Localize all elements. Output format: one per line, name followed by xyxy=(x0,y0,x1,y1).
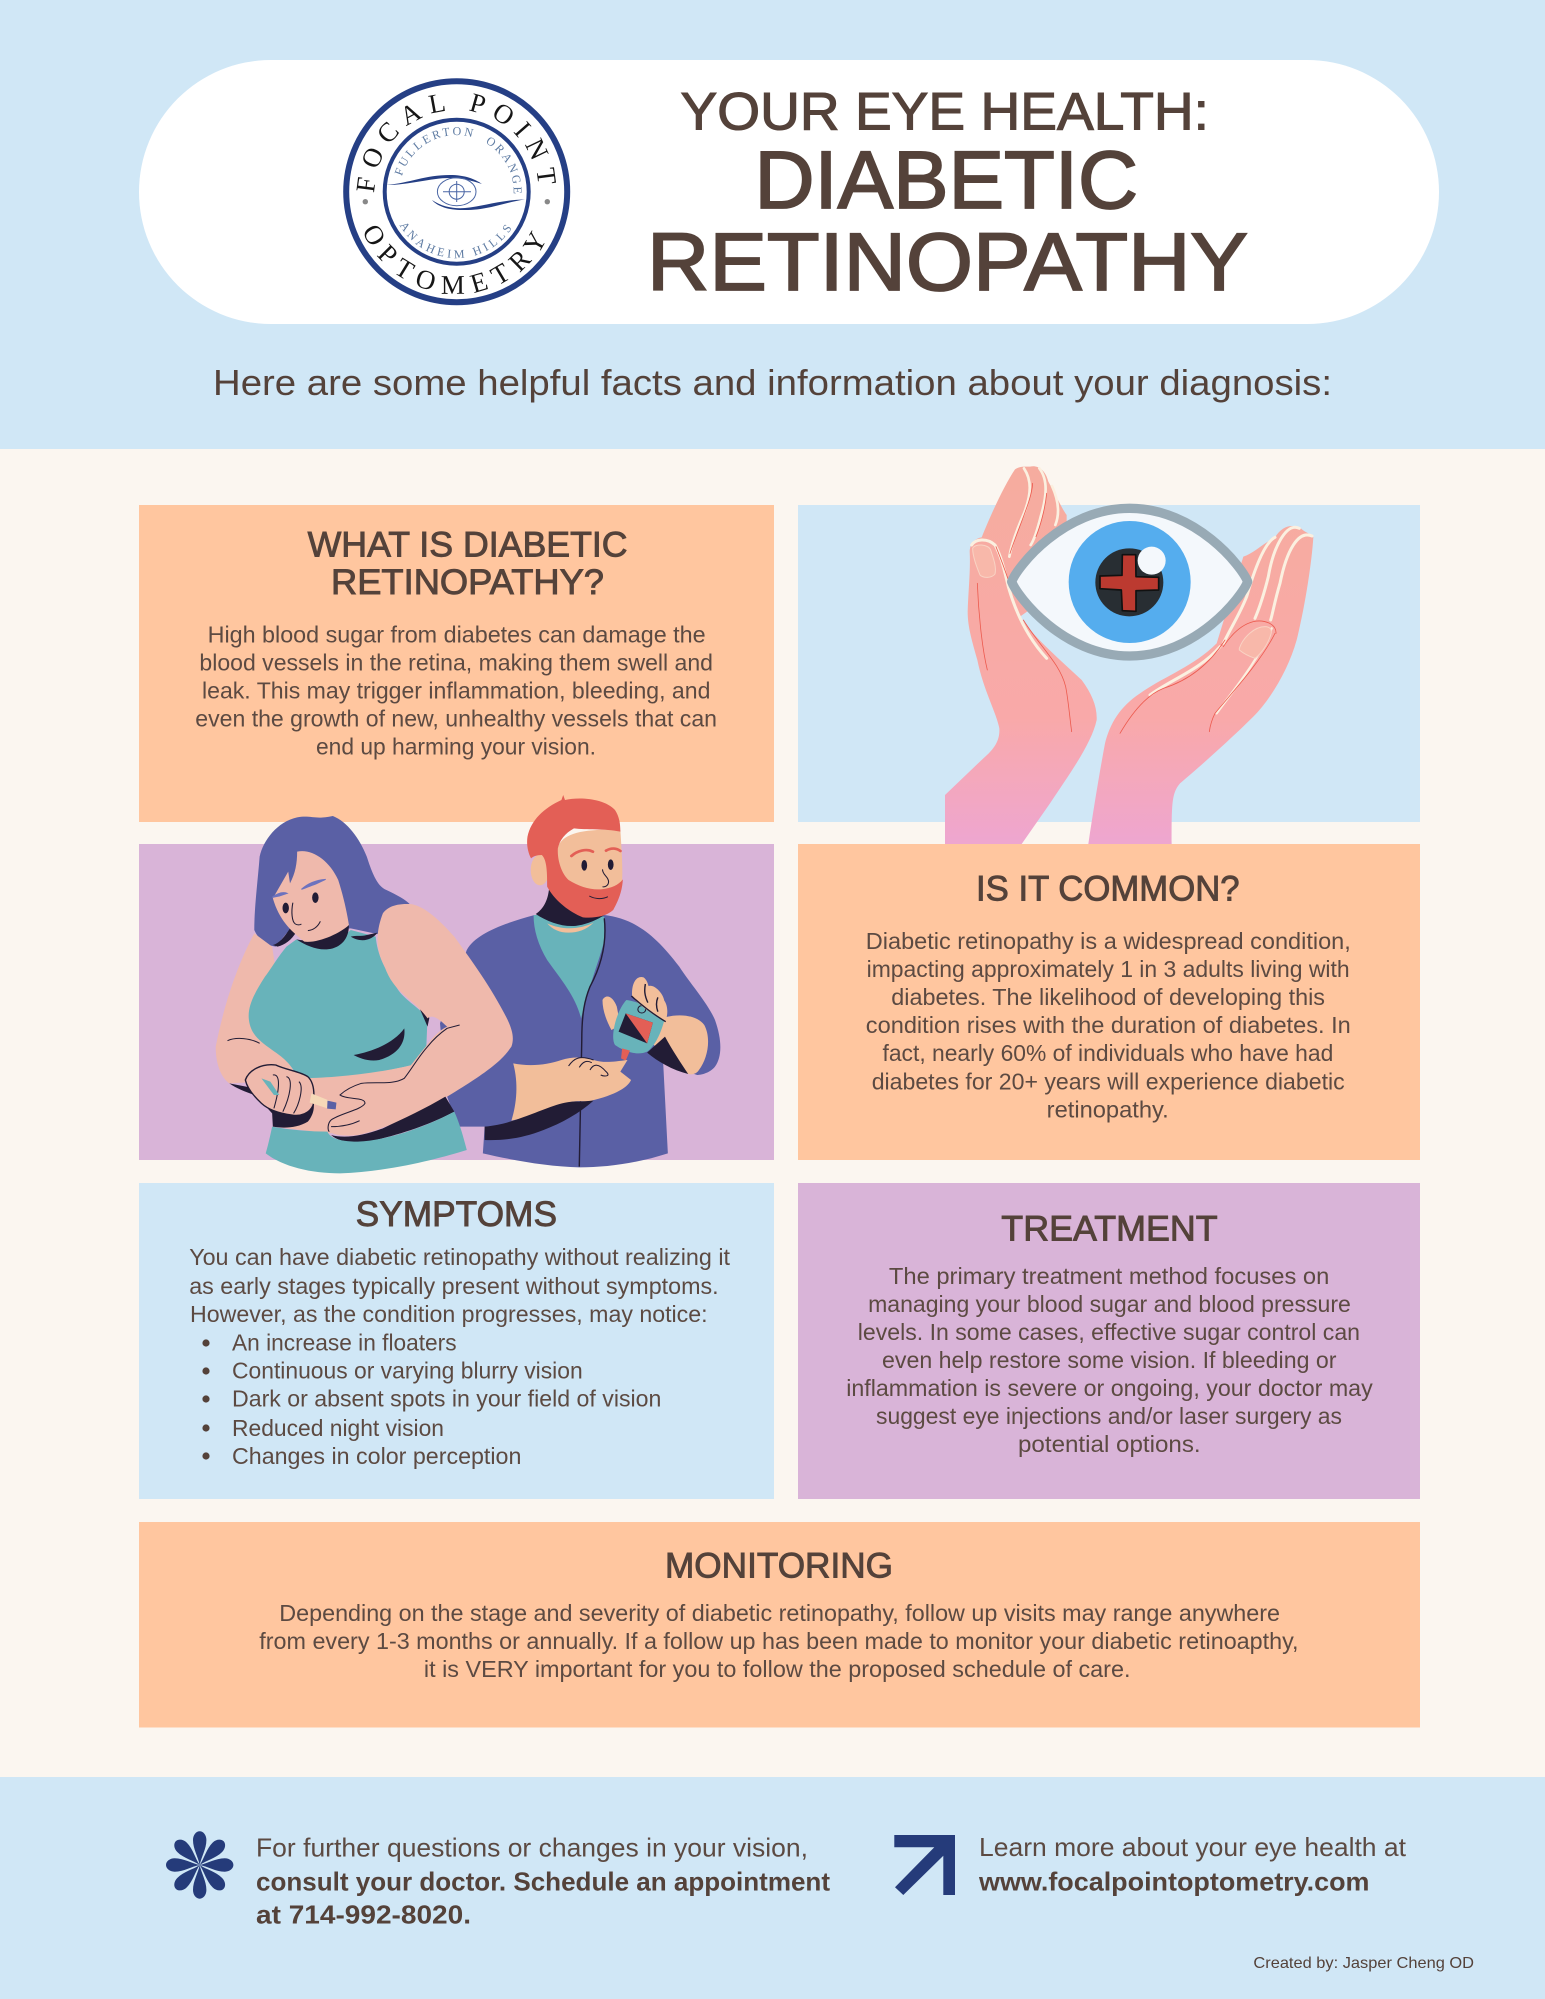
logo: Focal Point Optometry: ORANGE xyxy=(487,138,522,194)
eye xyxy=(1012,508,1248,656)
heading: what is xyxy=(308,525,628,602)
body text: what is: leak. This may trigger inflammation, bleeding, and xyxy=(202,678,710,704)
body text: treatment xyxy=(846,1263,1373,1457)
footer text: learn more: Learn more about your eye health at xyxy=(979,1832,1407,1862)
body text: treatment: levels. In some cases, effective sugar control can xyxy=(858,1319,1360,1345)
icon: arrow xyxy=(894,1835,955,1895)
bullet list: symptoms: Continuous or varying blurry vision xyxy=(232,1358,583,1384)
heading: is it common: IS IT COMMON? xyxy=(976,869,1240,908)
title: YOUR EYE HEALTH: xyxy=(680,82,1209,142)
bullet list: symptoms: An increase in floaters xyxy=(232,1330,457,1356)
woman's midriff and arm xyxy=(273,904,513,1136)
right hand xyxy=(1088,526,1313,844)
body text: is it common: retinopathy. xyxy=(1047,1097,1169,1123)
icon: flower xyxy=(166,1831,233,1899)
footer text: consult your doctor: For further questions or changes in your vision, xyxy=(256,1833,808,1863)
heading: what is: WHAT IS DIABETIC xyxy=(308,525,628,564)
woman's hand with insulin pen xyxy=(227,1038,336,1128)
subtitle: Here are some helpful facts and information about your diagnosis: xyxy=(213,362,1332,403)
man's lower arm and hand xyxy=(485,1057,631,1140)
panel: what is diabetic retinopathy xyxy=(139,505,774,822)
footer text: consult your doctor: consult your doctor. Schedule an appointment xyxy=(256,1867,830,1897)
panel: people illustration background xyxy=(139,844,774,1160)
body text: monitoring: Depending on the stage and severity of diabetic retinopathy, follow up visits may range anywhere xyxy=(279,1600,1280,1626)
footer text: consult your doctor xyxy=(256,1833,830,1930)
body text: what is: end up harming your vision. xyxy=(316,734,596,760)
footer text: learn more xyxy=(978,1832,1407,1897)
heading: monitoring: MONITORING xyxy=(665,1546,893,1585)
logo: Focal Point Optometry xyxy=(343,78,570,306)
man xyxy=(440,795,720,1167)
header band xyxy=(0,0,1545,449)
heading: symptoms: SYMPTOMS xyxy=(356,1195,557,1234)
bullet list: symptoms: Dark or absent spots in your field of vision xyxy=(232,1386,661,1412)
body text: what is xyxy=(195,622,717,760)
title xyxy=(647,82,1248,308)
body text: is it common: diabetes for 20+ years will experience diabetic xyxy=(872,1069,1345,1095)
body text: treatment: managing your blood sugar and blood pressure xyxy=(868,1291,1351,1317)
logo: Focal Point Optometry: ANAHEIM HILLS xyxy=(400,224,511,258)
body text: treatment: The primary treatment method focuses on xyxy=(889,1263,1329,1289)
body text: monitoring xyxy=(259,1600,1298,1682)
logo: Focal Point Optometry: OPTOMETRY xyxy=(364,226,545,294)
bullet list: symptoms: Reduced night vision xyxy=(232,1415,444,1441)
woman's shirt shadows xyxy=(354,988,429,1060)
panel: monitoring xyxy=(139,1522,1420,1728)
logo: Focal Point Optometry: FULLERTON xyxy=(394,127,474,176)
footer text: consult your doctor: at 714-992-8020. xyxy=(256,1900,471,1930)
body text: is it common: condition rises with the duration of diabetes. In xyxy=(866,1012,1351,1038)
body text: is it common: impacting approximately 1 in 3 adults living with xyxy=(867,956,1350,982)
logo: Focal Point Optometry: FOCAL POINT xyxy=(356,93,556,192)
body text: what is: High blood sugar from diabetes can damage the xyxy=(208,622,706,648)
body text: symptoms intro: However, as the condition progresses, may notice: xyxy=(190,1301,708,1327)
illustration: woman and man checking blood sugar xyxy=(216,795,720,1173)
body text: symptoms intro: You can have diabetic retinopathy without realizing it xyxy=(189,1244,730,1270)
woman xyxy=(216,816,513,1173)
footer band xyxy=(0,1777,1545,1999)
body text: what is: even the growth of new, unhealthy vessels that can xyxy=(195,706,717,732)
body text: symptoms intro xyxy=(189,1244,730,1327)
body text: treatment: potential options. xyxy=(1018,1431,1201,1457)
left hand xyxy=(945,466,1097,844)
heading: treatment: TREATMENT xyxy=(1001,1210,1218,1249)
body text: is it common: Diabetic retinopathy is a widespread condition, xyxy=(866,928,1351,954)
body text: is it common xyxy=(866,928,1351,1123)
body text: symptoms intro: as early stages typically present without symptoms. xyxy=(189,1273,719,1299)
footer text: learn more: www.focalpointoptometry.com xyxy=(978,1867,1370,1897)
title pill xyxy=(139,60,1439,324)
body text: treatment: even help restore some vision. If bleeding or xyxy=(882,1347,1337,1373)
bullet list: symptoms: Changes in color perception xyxy=(232,1443,521,1469)
panel: is it common xyxy=(798,844,1420,1160)
body text: is it common: diabetes. The likelihood of developing this xyxy=(891,984,1325,1010)
credit line: Created by: Jasper Cheng OD xyxy=(1253,1955,1474,1972)
body text: monitoring: it is VERY important for you to follow the proposed schedule of care. xyxy=(424,1656,1130,1682)
panel: treatment xyxy=(798,1183,1420,1499)
body text: is it common: fact, nearly 60% of individuals who have had xyxy=(882,1040,1333,1066)
body text: what is: blood vessels in the retina, making them swell and xyxy=(199,650,713,676)
illustration: hands cradling eye xyxy=(945,466,1313,844)
title: DIABETIC xyxy=(754,135,1138,226)
body text: treatment: suggest eye injections and/or laser surgery as xyxy=(876,1403,1342,1429)
bullet list: symptoms xyxy=(202,1330,661,1469)
body text: treatment: inflammation is severe or ongoing, your doctor may xyxy=(846,1375,1373,1401)
title: RETINOPATHY xyxy=(647,217,1248,308)
heading: what is: RETINOPATHY? xyxy=(331,563,604,602)
panel: symptoms xyxy=(139,1183,774,1499)
man's forearm and glucose meter xyxy=(602,977,708,1074)
body text: monitoring: from every 1-3 months or annually. If a follow up has been made to monitor your diabetic retinoapthy, xyxy=(259,1628,1298,1654)
panel: hands illustration background xyxy=(798,505,1420,822)
